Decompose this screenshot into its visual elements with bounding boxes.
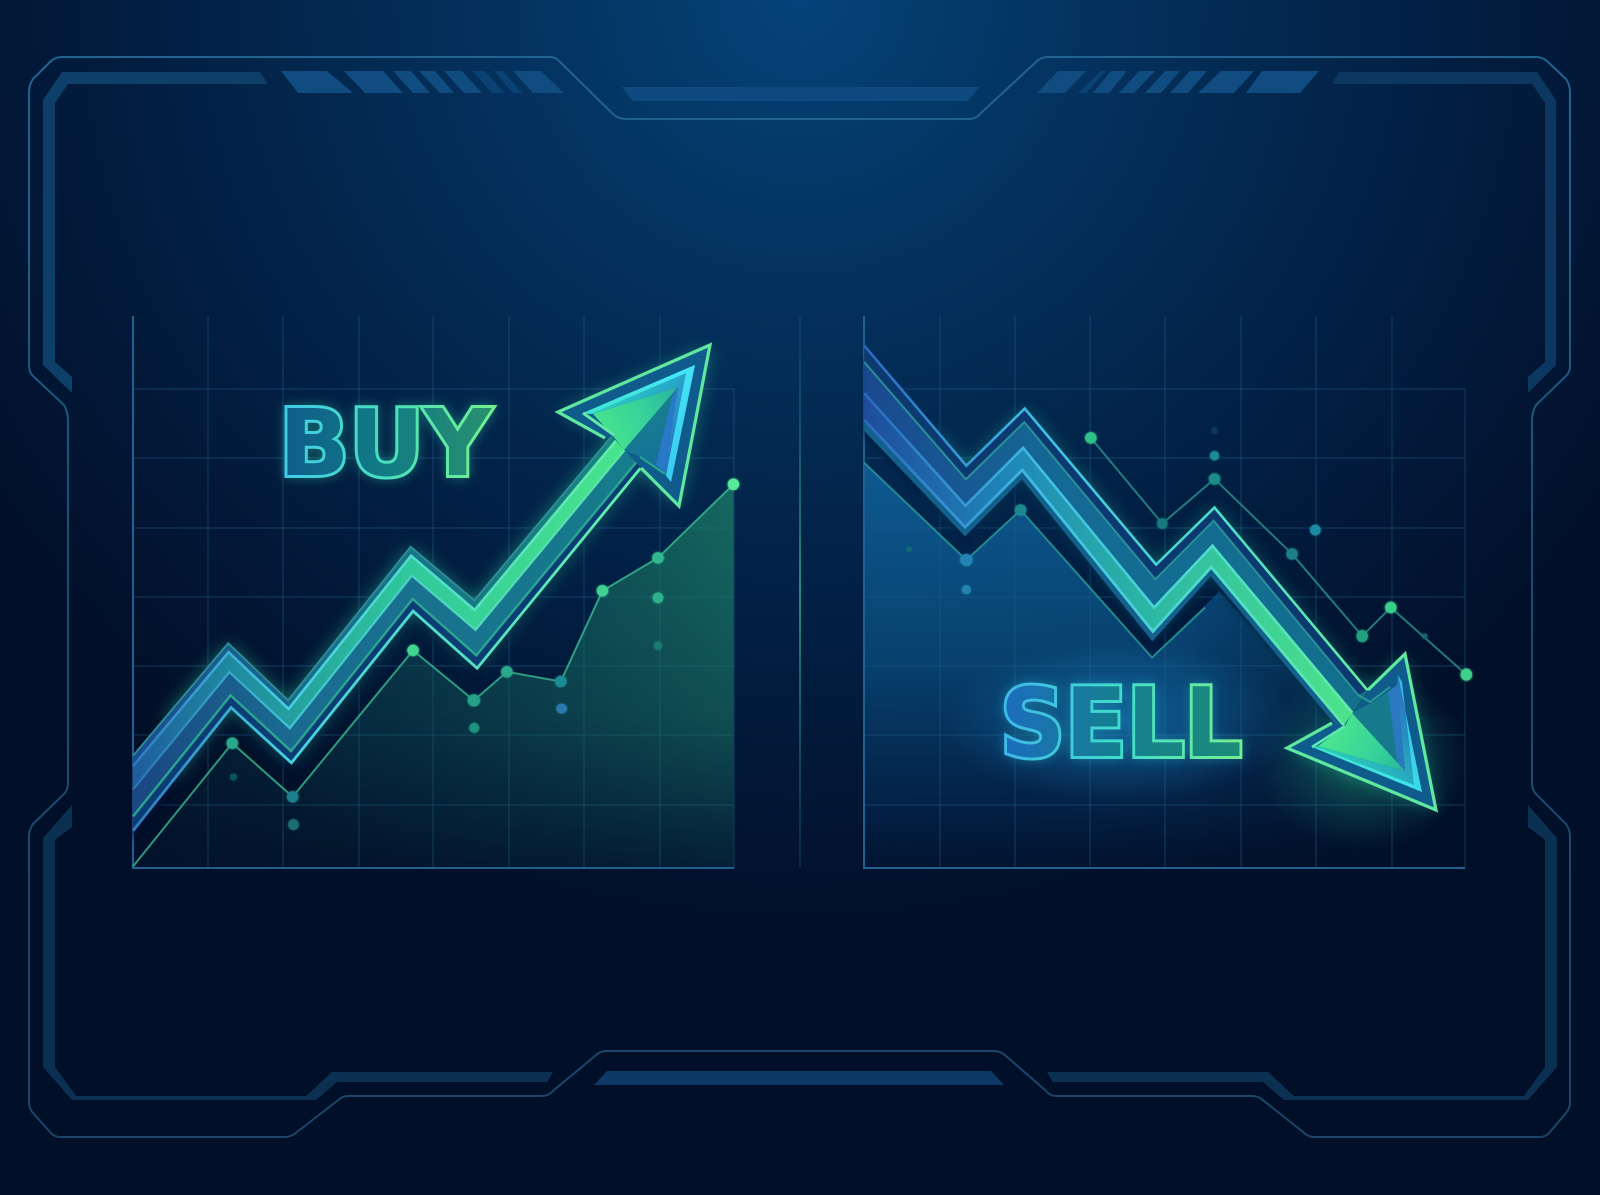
buy data points <box>227 479 739 830</box>
buy axes <box>133 316 734 868</box>
buy label: BUY <box>279 390 492 497</box>
top right hash stripes <box>1037 71 1319 93</box>
lower right bracket band <box>1047 805 1557 1100</box>
shaft dark stripe <box>864 346 1368 695</box>
sell line chart <box>1091 438 1466 675</box>
top left bracket band <box>43 72 268 393</box>
sell label: SELL <box>1000 669 1242 779</box>
sell data points <box>906 427 1472 681</box>
buy line chart <box>133 484 733 866</box>
buy label: BUY <box>279 390 492 497</box>
sell lower line <box>864 463 1205 657</box>
arrow glow <box>169 347 710 784</box>
top centre bar <box>622 87 979 101</box>
sell axes <box>864 316 1465 868</box>
sell arrow <box>864 346 1436 811</box>
arrow head <box>1287 654 1436 810</box>
bottom centre bar <box>594 1071 1004 1085</box>
top left hash stripes <box>281 71 564 93</box>
buy arrow <box>133 345 710 841</box>
shaft navy stripe <box>133 458 640 831</box>
arrow shaft <box>133 436 640 831</box>
shaft lines <box>133 436 640 831</box>
sell grid <box>864 316 1465 868</box>
top right bracket band <box>1332 72 1556 393</box>
arrow glow <box>932 409 1436 811</box>
arrow head <box>558 345 710 506</box>
shaft lines <box>864 346 1368 725</box>
shaft bright stripe <box>864 393 1352 725</box>
buy grid <box>133 316 734 868</box>
sell area chart <box>865 464 1356 848</box>
lower left bracket band <box>43 805 553 1100</box>
panel: sell chart <box>864 316 1472 868</box>
buy area chart <box>188 488 734 867</box>
sell label glow <box>945 640 1295 804</box>
buy label: BUY <box>279 390 492 497</box>
sell head glow <box>1257 670 1467 850</box>
arrow shaft <box>864 346 1368 725</box>
shaft mid stripe <box>133 450 640 816</box>
arrow shadow <box>133 468 640 841</box>
sell label: SELL <box>1000 669 1242 779</box>
shaft bright stripe <box>133 441 624 789</box>
arrow shadow <box>864 356 1344 738</box>
shaft dim underside <box>864 420 1344 731</box>
sell label: SELL <box>1000 669 1242 779</box>
panel: buy chart <box>133 316 739 868</box>
centre divider <box>799 316 801 868</box>
